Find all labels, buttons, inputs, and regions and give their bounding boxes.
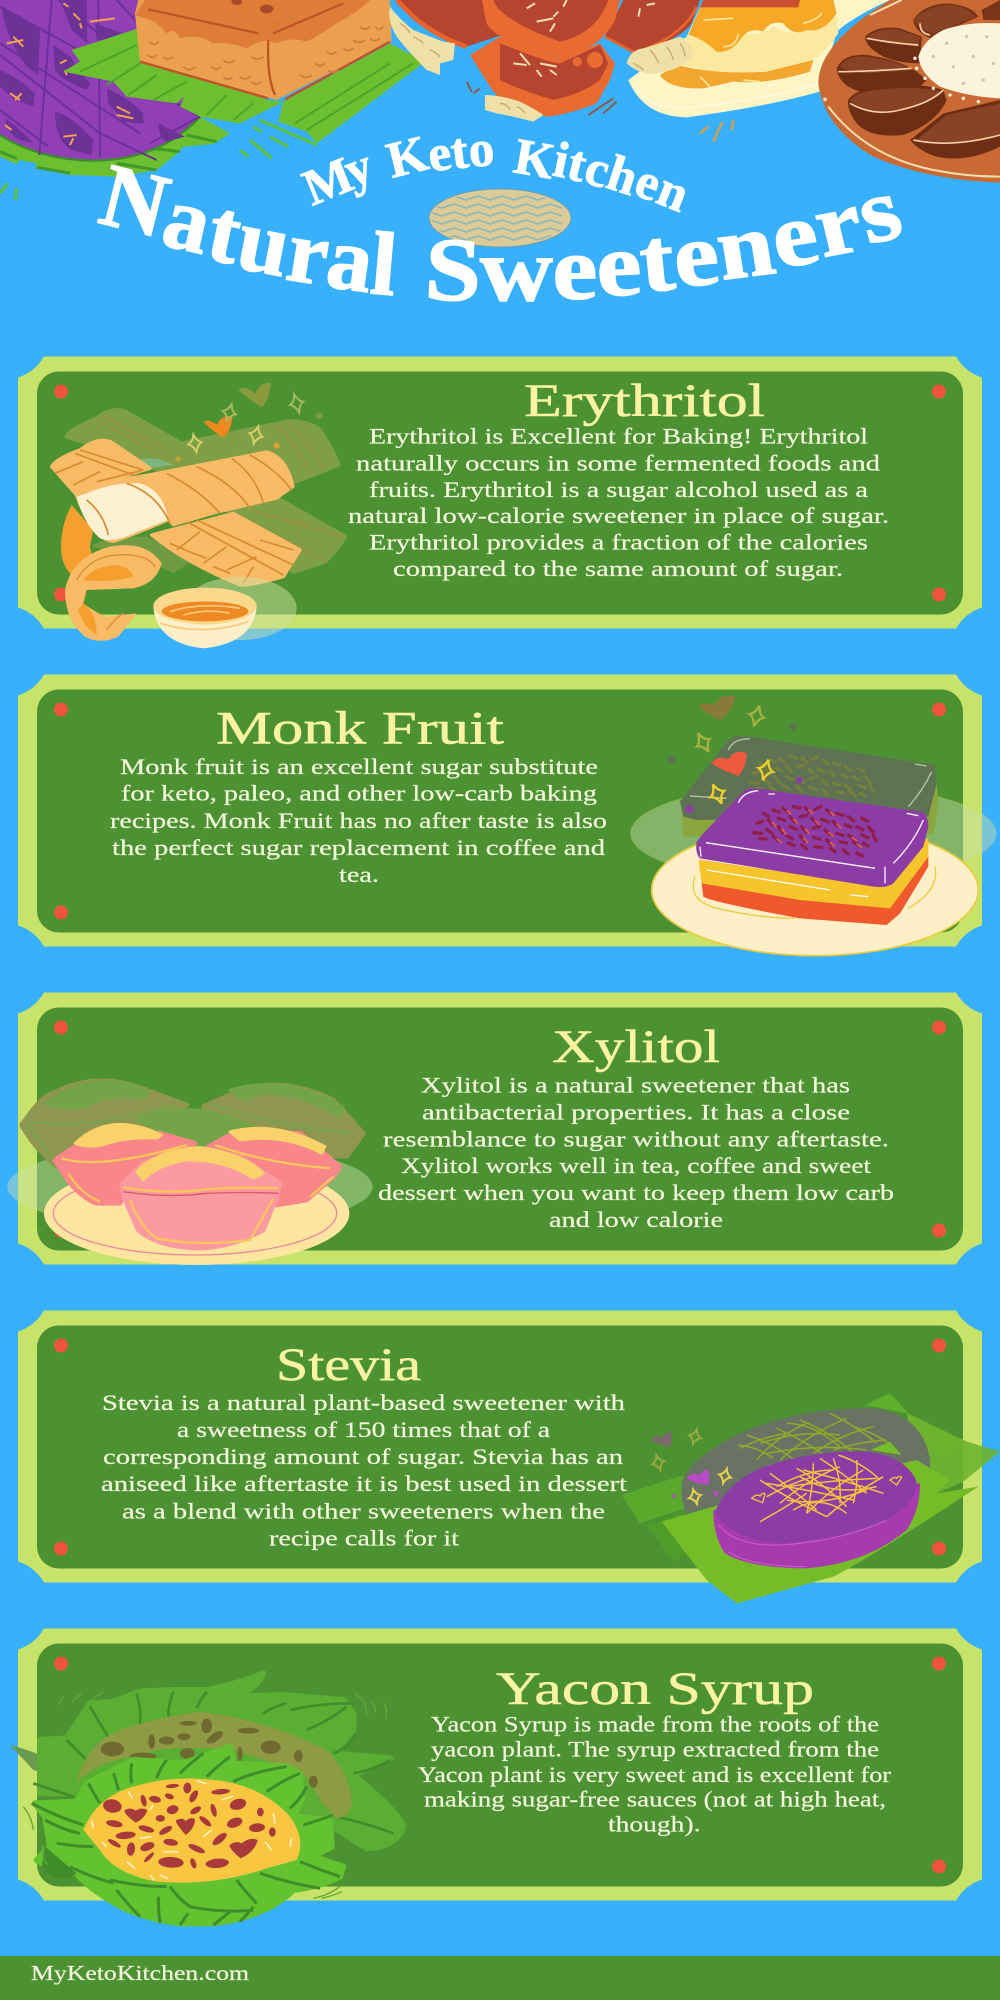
text block: for keto, paleo, and other low-carb baking xyxy=(121,781,597,806)
text block: making sugar-free sauces (not at high heat, xyxy=(424,1787,886,1812)
text block: Xylitol is a natural sweetener that has xyxy=(421,1073,850,1098)
heading: Yacon Syrup xyxy=(496,1663,814,1715)
text block: recipes. Monk Fruit has no after taste is also xyxy=(110,808,607,833)
panel: Yacon Syrup xyxy=(10,1628,982,1925)
text block: the perfect sugar replacement in coffee and xyxy=(112,835,605,860)
title: My Keto Kitchen: My Keto Kitchen xyxy=(296,121,697,224)
heading: Erythritol xyxy=(524,375,765,427)
icon: pink muffins on plate xyxy=(7,1081,373,1265)
panel: Xylitol xyxy=(7,992,982,1265)
icon: purple cake with golden threads xyxy=(622,1393,1000,1603)
icon: rolled leaf sweets with dip xyxy=(52,383,345,648)
icon: purple cake on leaves xyxy=(0,0,230,177)
text block: recipe calls for it xyxy=(269,1525,459,1550)
text block xyxy=(378,1073,894,1232)
icon: flan on a cream plate xyxy=(627,0,890,142)
icon: red muffins xyxy=(389,0,700,122)
card frame xyxy=(18,1628,982,1900)
heading: Xylitol xyxy=(552,1021,720,1073)
icon: chocolate plate with rice xyxy=(818,0,1000,183)
text block: Xylitol works well in tea, coffee and sweet xyxy=(401,1153,871,1178)
card frame xyxy=(18,674,982,946)
text block: compared to the same amount of sugar. xyxy=(393,556,843,581)
text block: natural low-calorie sweetener in place of sugar. xyxy=(348,503,889,528)
card frame xyxy=(18,356,982,628)
panel: Stevia xyxy=(18,1310,1000,1603)
text block: Yacon Syrup is made from the roots of the xyxy=(431,1712,879,1737)
footer website text: MyKetoKitchen.com xyxy=(31,1961,249,1985)
text block: antibacterial properties. It has a close xyxy=(422,1100,850,1125)
card frame xyxy=(18,1310,982,1582)
text block: a sweetness of 150 times that of a xyxy=(177,1417,550,1442)
title: Natural Sweeteners xyxy=(91,145,911,321)
text block: yacon plant. The syrup extracted from the xyxy=(431,1737,879,1762)
panel: Monk Fruit xyxy=(18,674,996,956)
text block: fruits. Erythritol is a sugar alcohol used as a xyxy=(369,477,868,502)
text block: Yacon plant is very sweet and is excellent for xyxy=(418,1762,892,1787)
text block: though). xyxy=(608,1812,700,1837)
text block: tea. xyxy=(339,862,379,887)
icon: woven tray xyxy=(429,189,571,247)
title: Natural Sweeteners: Natural xyxy=(91,145,401,315)
text block: dessert when you want to keep them low carb xyxy=(378,1180,894,1205)
text block: as a blend with other sweeteners when the xyxy=(122,1498,605,1524)
icon: orange cake on leaves xyxy=(63,0,425,143)
text block xyxy=(101,1390,627,1550)
text block xyxy=(348,424,889,581)
text block: and low calorie xyxy=(549,1207,723,1232)
icon: layered cake on plate xyxy=(631,696,996,956)
heading: Stevia xyxy=(276,1339,421,1391)
panel: Erythritol xyxy=(18,356,982,648)
text block: corresponding amount of sugar. Stevia has an xyxy=(103,1444,623,1469)
text block: Stevia is a natural plant-based sweetener with xyxy=(102,1390,625,1415)
text block xyxy=(110,754,607,887)
header food illustrations xyxy=(0,0,1000,212)
icon: sticky rice on banana leaf xyxy=(10,1673,403,1925)
title: Natural Sweeteners: Sweeteners xyxy=(423,158,911,321)
text block: Erythritol is Excellent for Baking! Erythritol xyxy=(369,424,868,449)
text block: aniseed like aftertaste it is best used in dessert xyxy=(101,1471,627,1496)
heading: Monk Fruit xyxy=(216,702,504,754)
icon: motion ticks xyxy=(0,118,318,200)
card frame xyxy=(18,992,982,1264)
text block: Monk fruit is an excellent sugar substitute xyxy=(120,754,598,779)
footer xyxy=(0,1956,1000,2000)
text block: Erythritol provides a fraction of the calories xyxy=(369,530,868,555)
text block xyxy=(418,1712,892,1837)
text block: resemblance to sugar without any aftertaste. xyxy=(383,1126,889,1152)
text block: naturally occurs in some fermented foods and xyxy=(356,450,880,476)
